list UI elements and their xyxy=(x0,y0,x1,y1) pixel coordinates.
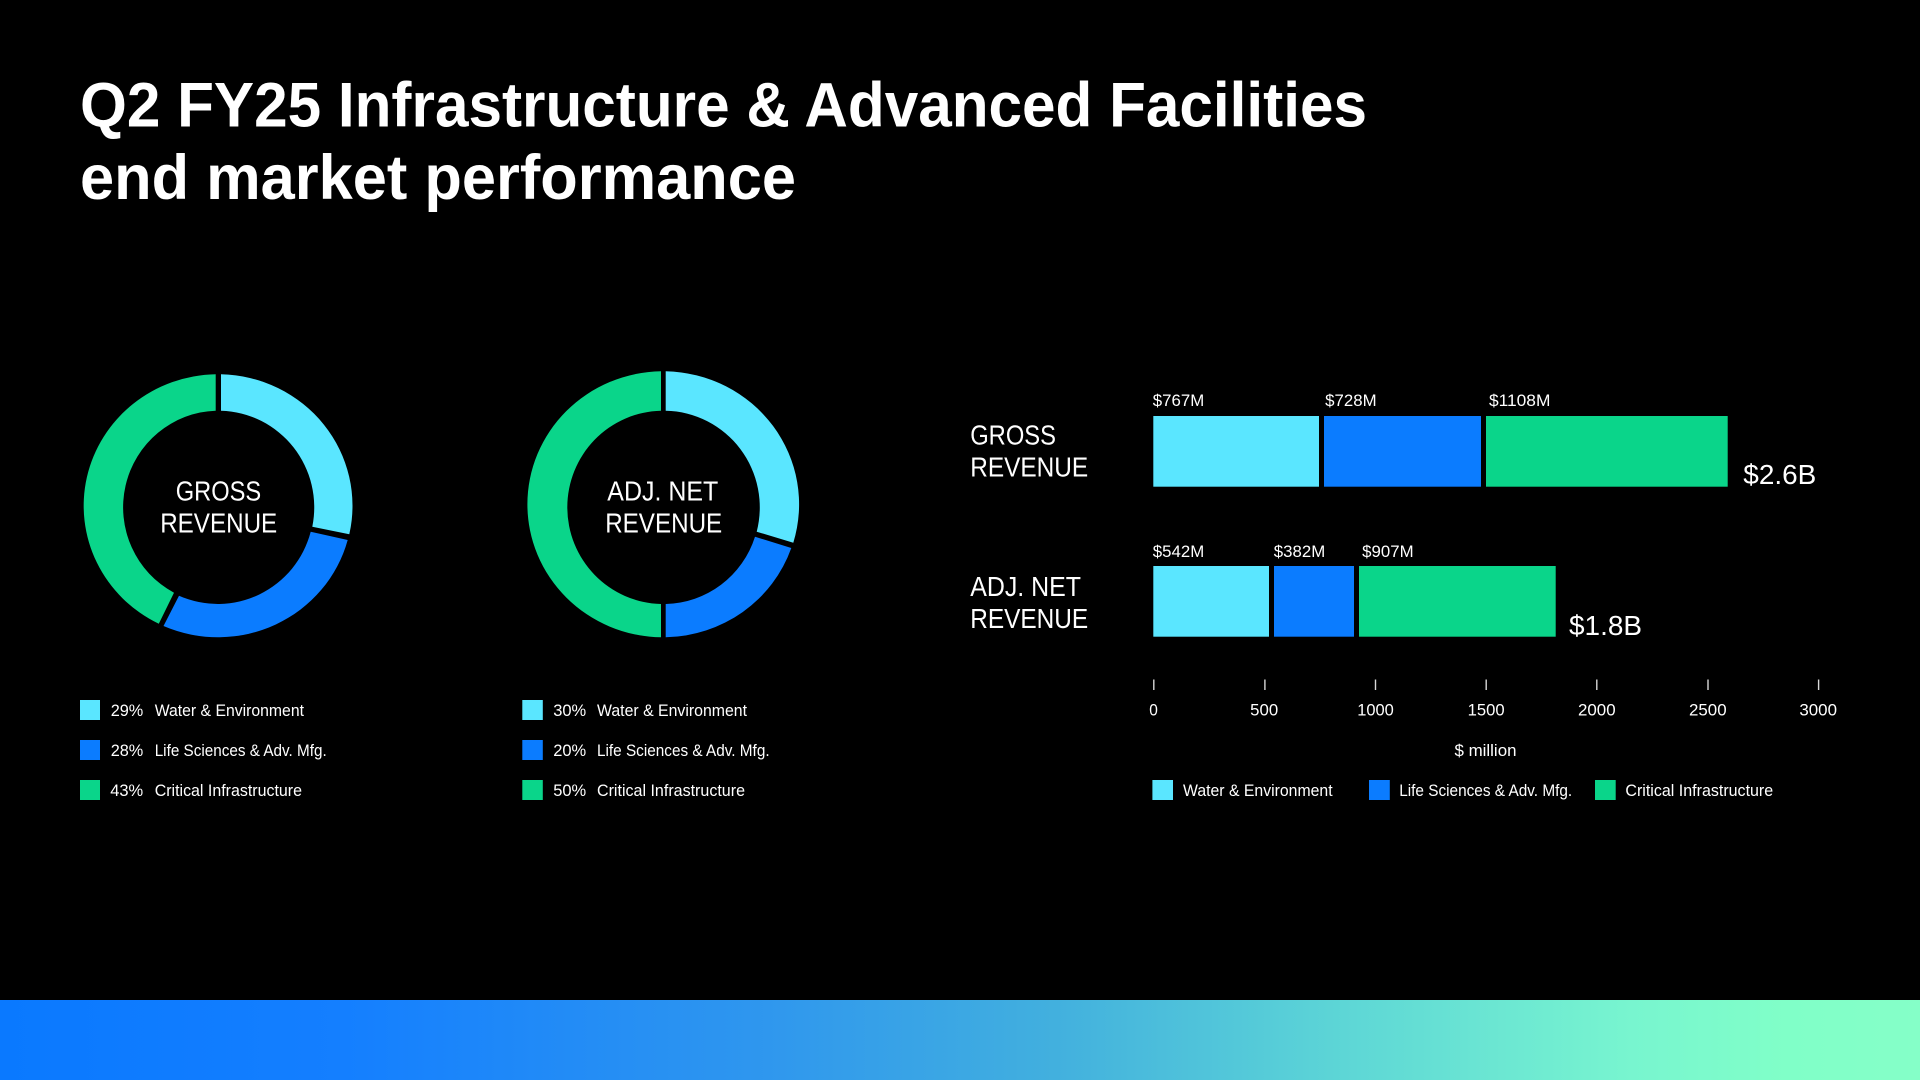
legend: bar chart: Life Sciences & Adv. Mfg. xyxy=(1399,782,1572,800)
legend: gross revenue shares: 43% xyxy=(110,782,144,800)
donut center label: adjusted net revenue: REVENUE xyxy=(605,508,722,539)
legend: gross revenue shares xyxy=(80,700,327,800)
legend: gross revenue shares: 28% xyxy=(111,742,144,760)
panel: stacked bar chart xyxy=(970,392,1837,800)
total: gross revenue: $2.6B xyxy=(1743,459,1816,490)
value labels: adjusted net revenue xyxy=(1153,543,1414,561)
row label: gross revenue: GROSS xyxy=(970,420,1056,450)
legend: gross revenue shares: Water & Environment xyxy=(155,702,304,720)
row: gross revenue xyxy=(970,392,1816,490)
row label: adjusted net revenue: REVENUE xyxy=(970,603,1088,634)
x axis: 2500 xyxy=(1689,702,1727,720)
legend: bar chart: Critical Infrastructure xyxy=(1625,782,1773,800)
row label: adjusted net revenue: ADJ. NET xyxy=(970,571,1081,602)
legend: adjusted net revenue shares: Life Sciences & Adv. Mfg. xyxy=(597,742,770,760)
footer gradient band xyxy=(0,1000,1920,1080)
value labels: gross revenue: $767M xyxy=(1153,392,1204,410)
legend: adjusted net revenue shares: Water & Environment xyxy=(597,702,747,720)
title: Q2 FY25 Infrastructure & Advanced Facilities xyxy=(80,71,1367,141)
donut chart: gross revenue xyxy=(84,374,353,637)
legend: adjusted net revenue shares: 50% xyxy=(553,782,587,800)
donut center label: gross revenue: REVENUE xyxy=(160,508,277,539)
x axis xyxy=(1149,680,1837,720)
bar segments: gross revenue xyxy=(1153,416,1728,487)
x axis: 2000 xyxy=(1578,702,1616,720)
donut center label: adjusted net revenue: ADJ. NET xyxy=(607,476,718,507)
axis title: $ million xyxy=(1454,742,1516,760)
value labels: adjusted net revenue: $907M xyxy=(1362,543,1414,561)
title xyxy=(80,71,1367,213)
value labels: adjusted net revenue: $542M xyxy=(1153,543,1204,561)
legend: gross revenue shares: 29% xyxy=(111,702,144,720)
legend: adjusted net revenue shares: Critical Infrastructure xyxy=(597,782,745,800)
donut chart: adjusted net revenue xyxy=(527,371,799,637)
total: adjusted net revenue: $1.8B xyxy=(1569,610,1642,641)
x axis: 500 xyxy=(1250,702,1278,720)
panel: adjusted net revenue donut xyxy=(522,371,799,800)
row: adjusted net revenue xyxy=(970,543,1642,641)
legend: adjusted net revenue shares: 20% xyxy=(553,742,587,760)
row label: gross revenue: REVENUE xyxy=(970,452,1088,483)
panel: gross revenue donut xyxy=(80,374,353,800)
legend: adjusted net revenue shares: 30% xyxy=(553,702,587,720)
bar segments: adjusted net revenue xyxy=(1153,566,1556,637)
value labels: gross revenue: $1108M xyxy=(1489,392,1550,410)
legend: bar chart: Water & Environment xyxy=(1183,782,1333,800)
x axis: 1000 xyxy=(1357,702,1394,720)
row label: gross revenue xyxy=(970,420,1088,483)
legend: adjusted net revenue shares xyxy=(522,700,770,800)
x axis: 0 xyxy=(1149,702,1158,720)
title: end market performance xyxy=(80,143,796,213)
donut center label: adjusted net revenue xyxy=(605,476,722,539)
x axis: 3000 xyxy=(1799,702,1837,720)
x axis: 1500 xyxy=(1468,702,1505,720)
value labels: adjusted net revenue: $382M xyxy=(1274,543,1325,561)
legend: gross revenue shares: Critical Infrastructure xyxy=(155,782,302,800)
value labels: gross revenue: $728M xyxy=(1325,392,1377,410)
donut center label: gross revenue xyxy=(160,476,277,539)
row label: adjusted net revenue xyxy=(970,571,1088,634)
donut center label: gross revenue: GROSS xyxy=(176,476,261,507)
legend: bar chart xyxy=(1152,780,1773,800)
value labels: gross revenue xyxy=(1153,392,1550,410)
legend: gross revenue shares: Life Sciences & Adv. Mfg. xyxy=(155,742,327,760)
